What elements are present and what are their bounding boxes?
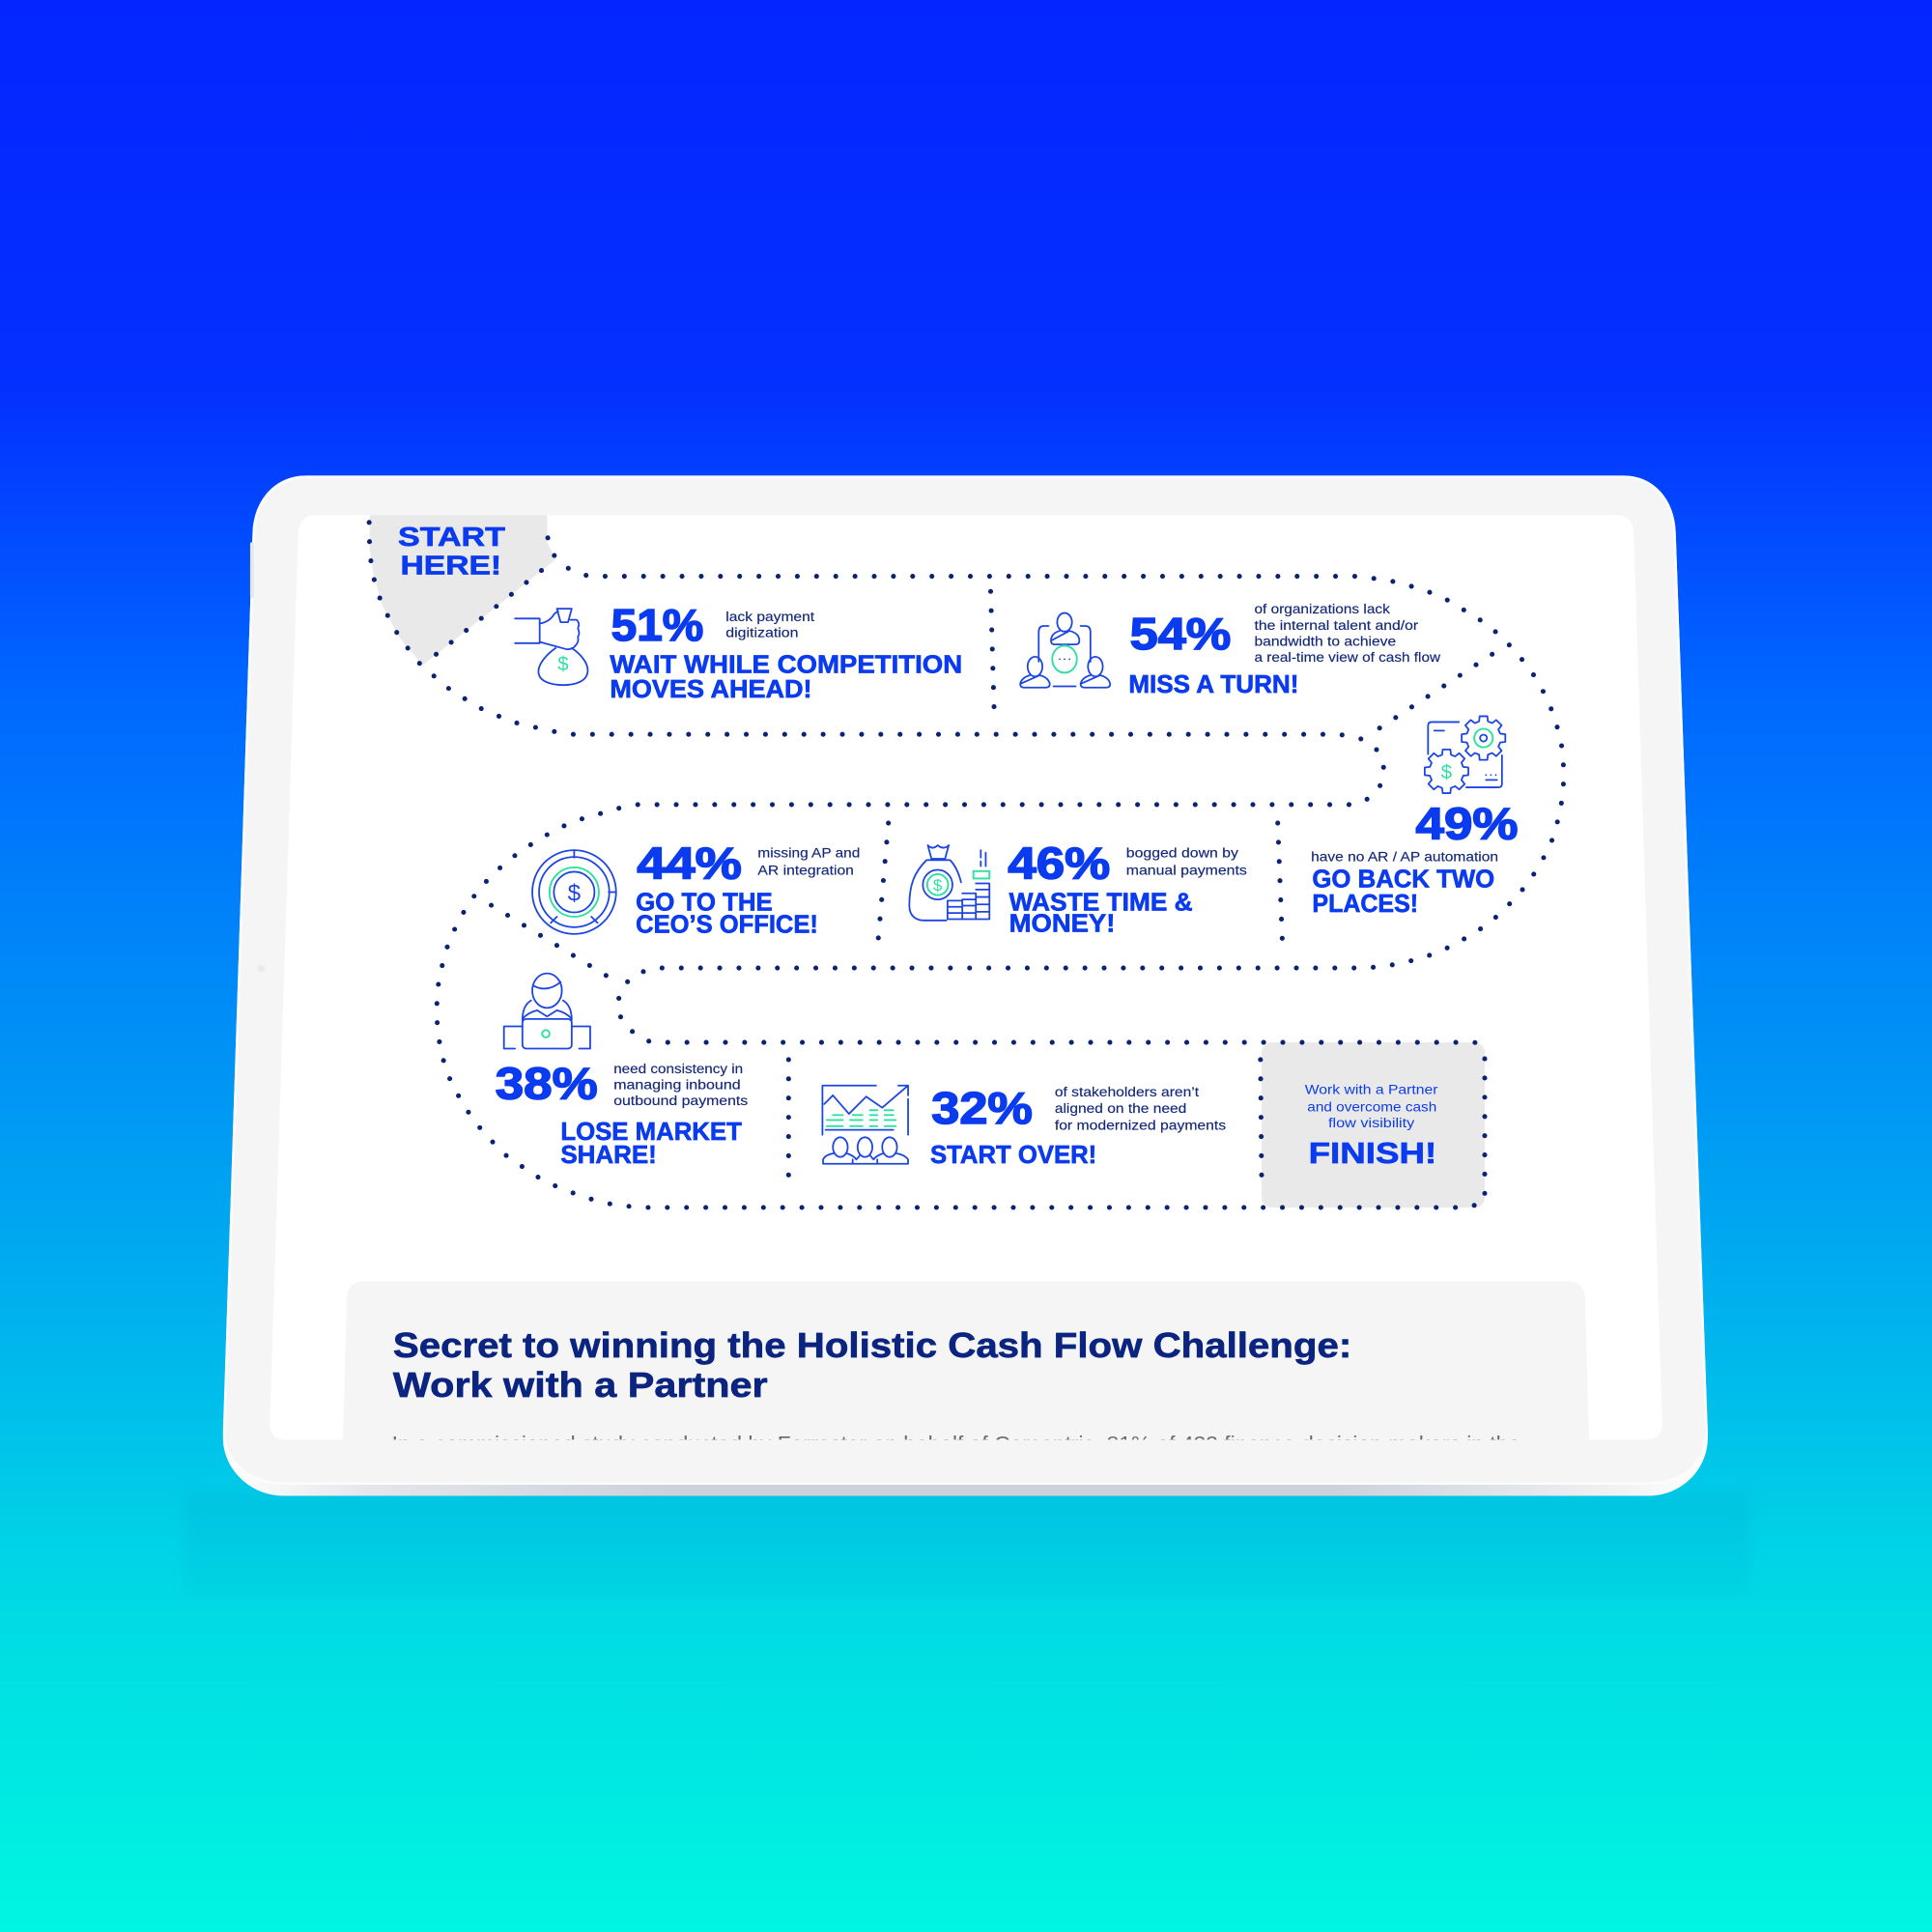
description: outbound payments [613,1093,748,1108]
description: of stakeholders aren’t [1055,1084,1199,1099]
finish message: Work with a Partner [1305,1082,1438,1097]
icon: person at laptop [504,974,590,1048]
icon: chart and audience [822,1086,908,1164]
description: a real-time view of cash flow [1254,649,1441,665]
stat 44%: 44% [637,838,742,888]
action [610,655,961,698]
description [1254,601,1441,665]
stat 38%: 38% [496,1059,598,1109]
action: MONEY! [1009,910,1115,937]
description [613,1061,748,1108]
panel: secret to winning [343,1282,1589,1455]
description [725,609,814,639]
description: of organizations lack [1254,601,1391,616]
dotted game board path [369,523,1564,1208]
action [636,893,816,933]
action: WAIT WHILE COMPETITION [610,651,962,678]
description: bogged down by [1126,845,1238,861]
description: digitization [725,624,799,639]
start here label [398,526,505,575]
step: 49% go back two places [1311,716,1518,918]
finish label: FINISH! [1309,1137,1436,1170]
step: 32% start over [822,1083,1226,1169]
step: 46% waste time and money [908,844,1246,933]
finish area grey box [1262,1042,1485,1208]
description: need consistency in [613,1061,743,1076]
description: have no AR / AP automation [1311,849,1498,865]
tablet screen [259,505,1676,1455]
finish message: and overcome cash [1307,1099,1436,1115]
action: MISS A TURN! [1128,671,1298,698]
icon: target dial with dollar: $ [568,880,582,906]
icon: money bag and coins [909,845,989,921]
icon: team around discussion [1020,613,1110,688]
action: WASTE TIME & [1009,890,1193,917]
description: aligned on the need [1055,1100,1186,1116]
action [1009,893,1192,933]
description [1055,1084,1226,1133]
stat 32%: 32% [931,1083,1033,1133]
action: LOSE MARKET [560,1119,742,1146]
description: the internal talent and/or [1254,617,1418,633]
finish message [1305,1082,1438,1130]
action: START OVER! [930,1142,1096,1169]
body text: In a commissioned study conducted by Forrester on behalf of Corcentric, 81% of 433 finance decision makers in the [392,1431,1520,1455]
action [560,1122,742,1164]
action: GO TO THE [636,890,773,917]
heading: Secret to winning the Holistic Cash Flow Challenge: [393,1326,1351,1365]
action: SHARE! [560,1142,657,1169]
start area grey shape [370,513,555,666]
description: missing AP and [757,845,860,861]
heading [393,1326,1351,1405]
step: 38% lose market share [496,974,748,1169]
description: AR integration [757,863,854,878]
finish message: flow visibility [1328,1115,1414,1130]
action [1313,869,1493,913]
step: 44% go to the ceo's office [531,846,860,935]
action: MOVES AHEAD! [610,676,812,703]
stat 51%: 51% [611,600,703,650]
stat 46%: 46% [1008,838,1110,888]
icon: gears and document: $ [1441,762,1453,783]
description [757,845,860,878]
icon: target dial with dollar [532,850,616,934]
description: managing inbound [613,1077,741,1093]
finish panel [1305,1082,1438,1170]
tablet device [223,475,1708,1495]
step: 51% wait while competition moves ahead [514,608,961,698]
description [1126,845,1247,878]
description: manual payments [1126,863,1247,878]
description: for modernized payments [1055,1118,1226,1133]
action: GO BACK TWO [1312,866,1494,893]
step: 54% miss a turn [1020,601,1441,698]
icon: hand holding money bag: $ [557,654,569,675]
icon: money bag and coins: $ [933,876,942,895]
icon: hand holding money bag [515,609,587,685]
tablet shadow [185,1493,1749,1596]
icon: gears and document [1425,716,1505,793]
stat 49%: 49% [1416,799,1518,849]
description: lack payment [725,609,814,624]
description: bandwidth to achieve [1254,633,1396,648]
action: PLACES! [1312,891,1418,918]
stat 54%: 54% [1130,609,1231,659]
start here label: HERE! [401,550,501,580]
heading: Work with a Partner [393,1366,768,1405]
start here label: START [398,522,505,552]
action: CEO’S OFFICE! [636,912,818,939]
